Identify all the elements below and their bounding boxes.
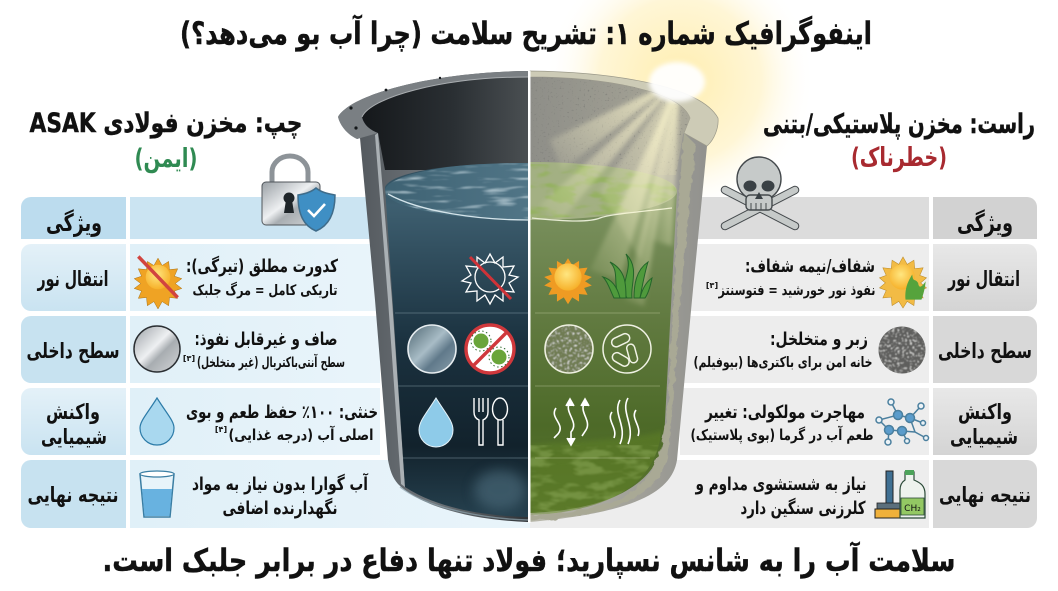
detail text: اصلی آب (درجه غذایی): [228, 426, 374, 444]
left header row: [21, 197, 380, 239]
icon: migration arrows: [554, 399, 589, 445]
left row backgrounds: [21, 244, 530, 528]
heading text: خنثی: ۱۰۰٪ حفظ طعم و بوی: [186, 402, 378, 423]
concrete half of tank: [530, 70, 718, 522]
heading text: آب گوارا بدون نیاز به مواد: [192, 472, 369, 495]
heading text: مهاجرت مولکولی: تغییر: [704, 402, 865, 423]
label: واکنش: [958, 400, 1012, 424]
steel half of tank: [338, 71, 528, 522]
white divider: [528, 71, 530, 523]
icon: porous disc: [878, 326, 926, 374]
background sun glow: [545, 0, 825, 220]
detail text: نفوذ نور خورشید = فتوسنتز: [718, 283, 876, 299]
title: اینفوگرافیک شماره ۱: تشریح سلامت (چرا آب بو می‌دهد؟): [180, 14, 872, 52]
icon: brush and chemical bottle: CH₂: [904, 504, 921, 514]
detail text: نگهدارنده اضافی: [222, 497, 338, 519]
left column title: ویژگی: [46, 209, 102, 237]
right row: chemical reaction: [690, 399, 1018, 449]
tank cutaway illustration: [338, 62, 718, 523]
icon: molecule: [876, 399, 928, 445]
icon: polished steel disc on tank: [408, 325, 456, 373]
heading text: کدورت مطلق (تیرگی):: [186, 255, 338, 277]
heading text: نیاز به شستشوی مداوم و: [695, 474, 866, 495]
right header row: [680, 197, 1037, 239]
icon: heat waves: [610, 398, 639, 444]
right row backgrounds: [530, 244, 1037, 528]
label: انتقال نور: [37, 267, 109, 291]
heading: left safe tag: (ایمن): [134, 144, 198, 174]
heading text: زبر و متخلخل:: [770, 329, 868, 350]
heading: right danger tag: (خطرناک): [851, 143, 947, 173]
citation: [۴]: [215, 425, 227, 434]
icon: seaweed: [603, 254, 652, 298]
icon: sun crossed out on tank: [462, 254, 518, 304]
right row: final result: [695, 470, 1031, 519]
citation: [۳]: [183, 354, 195, 363]
icon: fork and spoon: [474, 398, 508, 445]
sun flare: [649, 62, 705, 102]
label line two: شیمیایی: [950, 425, 1018, 449]
icon: sun with algae: [879, 257, 927, 308]
icon: steel disc: [134, 326, 180, 372]
left row: final result: [28, 471, 369, 519]
icon: rough surface disc on tank: [545, 325, 593, 373]
icon: glass of water: [140, 471, 174, 517]
icon: bacteria circle: [603, 325, 651, 373]
detail text: خانه امن برای باکتری‌ها (بیوفیلم): [694, 355, 872, 371]
left row: light transmission: [37, 255, 338, 309]
label: واکنش: [46, 400, 100, 424]
icon: sun with red slash: [134, 256, 182, 309]
label line two: شیمیایی: [41, 425, 107, 449]
citation: [۳]: [706, 281, 718, 290]
icon: skull and crossbones: [725, 157, 795, 226]
right row: light transmission: [706, 256, 1020, 308]
icon: padlock with shield: [262, 156, 335, 231]
detail text: سطح آنتی‌باکتریال (غیر متخلخل): [197, 353, 345, 371]
heading text: صاف و غیرقابل نفوذ:: [194, 329, 338, 350]
right row: inner surface: [694, 326, 1032, 374]
icon: no bacteria badge: [466, 325, 514, 373]
icon: sun in green water: [544, 258, 592, 304]
right column title: ویژگی: [957, 209, 1013, 237]
detail text: کلرزنی سنگین دارد: [740, 497, 866, 519]
heading: left tank: چپ: مخزن فولادی ASAK: [30, 108, 303, 139]
icon: water drop on tank: [419, 398, 453, 447]
panel: right table (dangerous tank): [530, 197, 1037, 528]
heading text: شفاف/نیمه شفاف:: [745, 256, 875, 277]
icon: water drop: [140, 398, 174, 445]
label: نتیجه نهایی: [939, 483, 1031, 507]
detail text: طعم آب در گرما (بوی پلاستیک): [690, 426, 874, 445]
label: نتیجه نهایی: [28, 483, 118, 507]
detail text: تاریکی کامل = مرگ جلبک: [192, 282, 338, 299]
left row: inner surface: [26, 326, 345, 372]
panel: left table (safe steel tank): [21, 197, 530, 528]
label: انتقال نور: [947, 267, 1020, 291]
icon: brush and chemical bottle: [875, 470, 925, 518]
label: سطح داخلی: [26, 339, 120, 363]
left row: chemical reaction: [41, 398, 378, 449]
